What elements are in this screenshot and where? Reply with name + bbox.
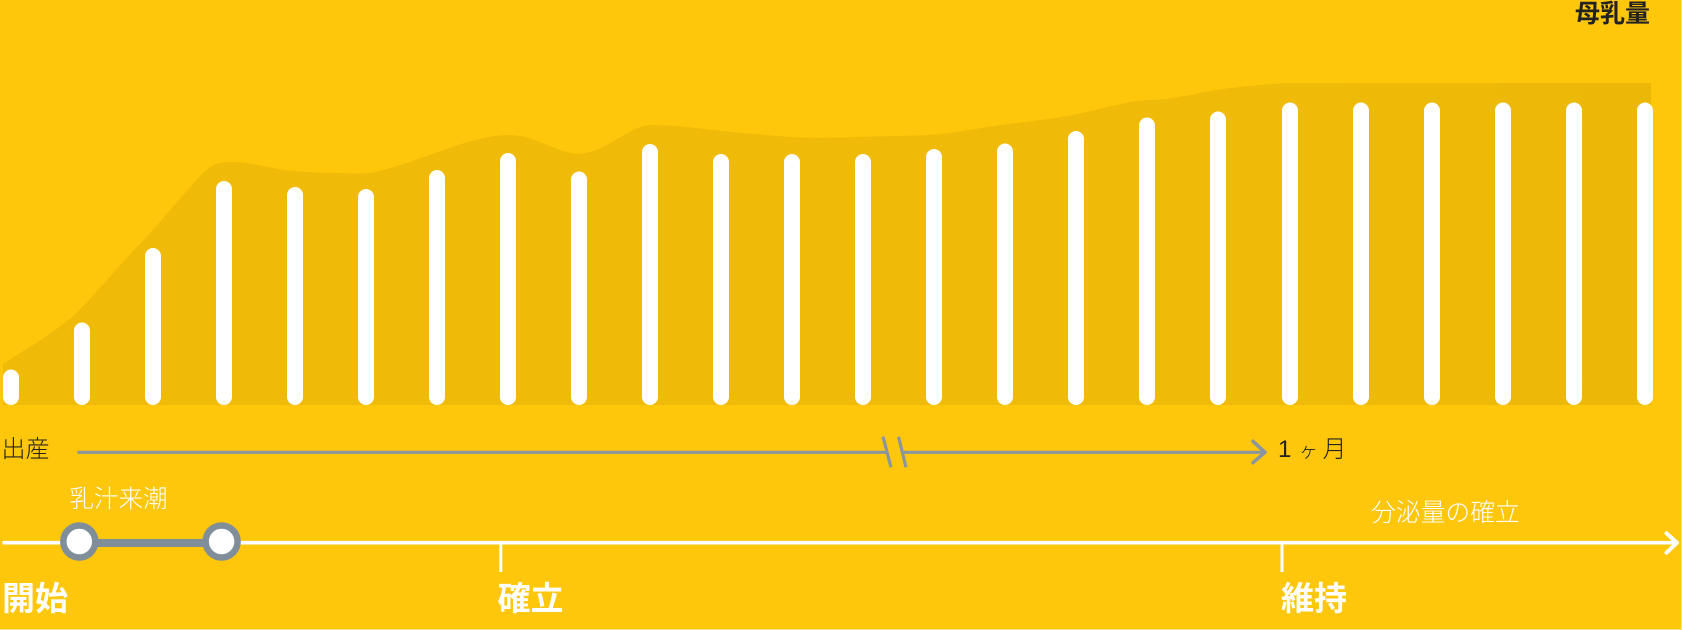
label: one month: 月 xyxy=(1322,436,1346,463)
stage label: establishment: 確立 xyxy=(498,580,564,617)
label: birth: 出産 xyxy=(2,436,50,463)
bar chart: daily milk volume bars xyxy=(3,102,1653,405)
marker: lactogenesis range xyxy=(63,526,238,558)
label: one month: ヶ xyxy=(1299,441,1318,462)
stage label: maintenance: 維持 xyxy=(1281,580,1347,617)
arrow: birth to one month, with axis break xyxy=(78,437,1265,467)
label: one month: 1 xyxy=(1278,436,1291,463)
timeline tick: maintenance xyxy=(1280,543,1284,572)
label: lactogenesis onset: 乳汁来潮 xyxy=(70,485,168,513)
label: establishment of secretion volume: 分泌量の確立 xyxy=(1371,499,1520,527)
stage label: start: 開始 xyxy=(2,580,68,617)
y-axis label: 母乳量 xyxy=(1575,0,1650,28)
area chart: milk volume curve xyxy=(3,83,1651,405)
timeline tick: establishment xyxy=(499,543,502,572)
arrow: white main timeline xyxy=(4,533,1677,553)
